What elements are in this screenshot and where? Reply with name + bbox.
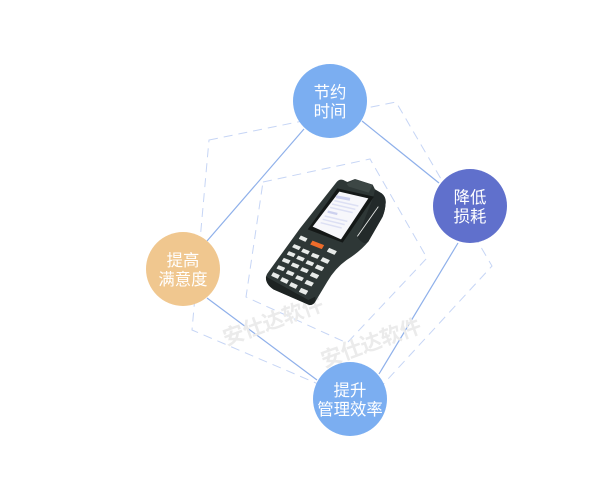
side stripe — [357, 207, 378, 236]
inner dashed polygon — [246, 159, 427, 343]
device body — [266, 179, 386, 305]
node: reduce loss: 损耗 — [454, 208, 486, 226]
watermark left: 安仕达软件 — [220, 293, 327, 350]
screen — [313, 192, 368, 239]
screen bezel — [308, 188, 374, 243]
node: improve management efficiency: 管理效率 — [317, 400, 383, 418]
device right shading — [357, 189, 386, 243]
node: improve satisfaction — [146, 232, 220, 306]
device base shading — [266, 277, 315, 305]
solid connecting lines — [207, 121, 458, 380]
node: improve management efficiency — [313, 362, 387, 436]
node: improve management efficiency: 提升 — [334, 382, 366, 400]
node: save time: 节约 — [314, 84, 346, 102]
orange key — [311, 241, 324, 249]
node: improve satisfaction: 满意度 — [158, 270, 208, 288]
scan head — [347, 179, 373, 193]
screen text lines — [321, 197, 358, 228]
node: reduce loss — [433, 169, 507, 243]
node: improve satisfaction: 提高 — [167, 252, 199, 270]
keypad — [272, 236, 336, 294]
node: reduce loss: 降低 — [454, 188, 486, 206]
watermark right: 安仕达软件 — [318, 315, 425, 372]
outer dashed polygon — [192, 102, 492, 404]
node: save time: 时间 — [314, 102, 346, 120]
node: save time — [293, 64, 367, 138]
